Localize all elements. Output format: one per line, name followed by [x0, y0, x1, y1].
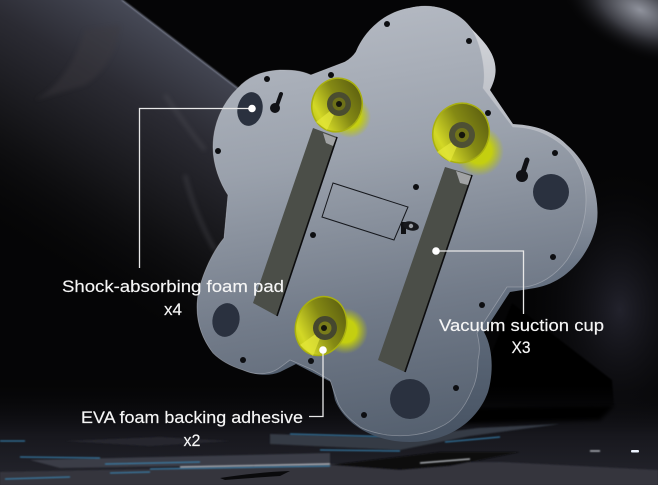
callout: foam pad leader — [140, 105, 256, 268]
device face — [197, 6, 586, 436]
device rim — [197, 6, 598, 442]
callout: foam pad label — [62, 277, 284, 319]
suction cup: top left — [304, 71, 371, 139]
screw holes — [215, 21, 558, 418]
foam pads — [209, 90, 569, 419]
callout: EVA adhesive label — [81, 408, 303, 450]
battery cover outline — [322, 183, 420, 240]
callout: EVA adhesive label: EVA foam backing adhesive — [81, 408, 303, 427]
callout: EVA adhesive leader — [309, 346, 327, 416]
suction cup: top right — [424, 95, 504, 176]
device: star-shaped base plate — [197, 6, 598, 442]
callout: foam pad label: Shock-absorbing foam pad — [62, 277, 284, 296]
suction cup: bottom — [287, 289, 368, 363]
water reflections on floor — [0, 424, 658, 485]
callout: suction cup label — [439, 316, 604, 357]
keyhole mounts — [270, 94, 528, 182]
right adhesive strip — [378, 167, 472, 372]
callout: suction cup leader — [432, 247, 524, 314]
left adhesive strip — [253, 128, 337, 316]
callout: suction cup label: X3 — [512, 338, 530, 357]
callout: foam pad label: x4 — [164, 300, 182, 319]
callout: suction cup label: Vacuum suction cup — [439, 316, 604, 335]
callout: EVA adhesive label: x2 — [184, 431, 200, 450]
